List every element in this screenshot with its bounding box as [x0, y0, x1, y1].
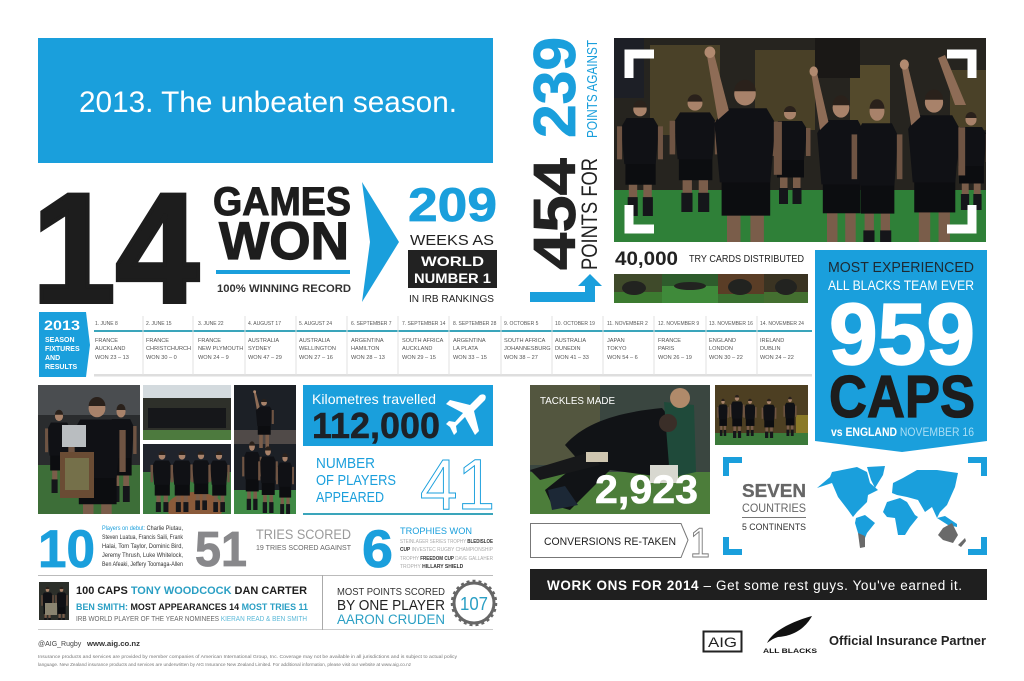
banner: work ons for 2014 — [530, 569, 987, 600]
photo strip — [614, 274, 808, 303]
stat: 40,000 try cards: 40,000 — [615, 249, 678, 270]
panel: 959 caps: MOST EXPERIENCED — [828, 260, 974, 276]
photo: four players on pitch — [143, 444, 231, 514]
stat: 6 trophies won: STEINLAGER SERIES TROPHY BLEDISLOE — [400, 539, 494, 545]
panel: kilometres travelled: 112,000 — [312, 405, 440, 446]
panel: season fixtures and results: 10. OCTOBER 19 — [555, 321, 595, 327]
stat: 209 weeks as world number 1: WEEKS AS — [410, 232, 494, 249]
logo: AIG — [704, 632, 742, 652]
stat: 2,923: 2,923 — [595, 468, 698, 512]
panel: season fixtures and results: JAPAN — [607, 338, 625, 344]
panel: season fixtures and results: PARIS — [658, 346, 675, 352]
panel: season fixtures and results: WON 33 – 15 — [453, 355, 487, 361]
legal text: language. New Zealand insurance products and services are underwritten by AIG Insurance New Zealand Limited. For additional information, please visit our website at www.aig.co.nz — [38, 662, 412, 668]
panel: 959 caps: vs ENGLAND NOVEMBER 16 — [831, 425, 974, 439]
stat: 6 trophies won: 6 — [362, 520, 393, 579]
photo: player with trophy — [38, 385, 140, 514]
stat: 209 weeks as world number 1: WORLD — [421, 254, 484, 269]
panel: season fixtures and results: AUSTRALIA — [555, 338, 586, 344]
panel: season fixtures and results: FRANCE — [658, 338, 681, 344]
stat: seven countries: COUNTRIES — [742, 501, 806, 515]
stat: 51 tries scored — [195, 523, 351, 577]
panel: season fixtures and results: WON 30 – 22 — [709, 355, 743, 361]
stat: 10 players on debut: Jeremy Thrush, Luke Whitelock, — [102, 553, 183, 559]
stat: number of players appeared: APPEARED — [316, 490, 384, 506]
panel: season fixtures and results: WON 26 – 19 — [658, 355, 692, 361]
stat: 14 games won: GAMES — [213, 180, 351, 224]
photo: team group with city — [143, 385, 231, 440]
stat: 454 points for: 454 — [522, 158, 588, 270]
photo: lineout — [234, 385, 296, 514]
callout: conversions re-taken: 1 — [690, 519, 710, 566]
stat: 14 games won — [32, 162, 351, 336]
panel: season fixtures and results: WON 30 – 0 — [146, 355, 177, 361]
contact line: @AIG_Rugby — [38, 641, 82, 648]
panel: season fixtures and results: 8. SEPTEMBER 28 — [453, 321, 497, 327]
arrow: points up — [530, 274, 602, 302]
stat: 209 weeks as world number 1: NUMBER 1 — [414, 271, 492, 286]
badge: 107: 107 — [460, 594, 488, 614]
panel: season fixtures and results: WON 38 – 27 — [504, 355, 538, 361]
panel: season fixtures and results: WON 29 – 15 — [402, 355, 436, 361]
stat: number of players appeared: NUMBER — [316, 456, 375, 472]
arrow: chevron — [362, 182, 399, 302]
panel: season fixtures and results: 11. NOVEMBER 2 — [607, 321, 648, 327]
panel: season fixtures and results: AND — [45, 355, 60, 362]
panel: season fixtures and results: AUCKLAND — [402, 346, 432, 352]
panel: season fixtures and results: 12. NOVEMBER 9 — [658, 321, 699, 327]
stat: 6 trophies won: TROPHY FREEDOM CUP DAVE GALLAHER — [400, 556, 493, 562]
stat: 209 weeks as world number 1: IN IRB RANKINGS — [409, 294, 494, 305]
panel: season fixtures and results: LONDON — [709, 346, 733, 352]
callout: conversions re-taken: CONVERSIONS RE-TAKEN — [544, 536, 676, 548]
panel: season fixtures and results: SYDNEY — [248, 346, 271, 352]
panel: season fixtures and results: TOKYO — [607, 346, 627, 352]
stat: 10 players on debut: Players on debut: Charlie Piutau, — [102, 526, 183, 532]
panel: season fixtures and results: SOUTH AFRICA — [504, 338, 546, 344]
title banner — [38, 38, 493, 163]
stat: 10 players on debut: 10 — [38, 520, 95, 579]
stat: 14 games won: 14 — [32, 162, 199, 336]
photo: tackle — [530, 385, 710, 514]
panel: season fixtures and results: AUSTRALIA — [248, 338, 279, 344]
stat: 10 players on debut: Steven Luatua, Francis Saili, Frank — [102, 535, 184, 541]
legal text — [38, 654, 458, 668]
contact line — [38, 639, 140, 648]
panel: season fixtures and results: 7. SEPTEMBER 14 — [402, 321, 446, 327]
stat: 209 weeks as world number 1: 209 — [408, 178, 497, 231]
official insurance partner: Official Insurance Partner — [829, 634, 986, 648]
panel: season fixtures and results: ARGENTINA — [453, 338, 486, 344]
panel: season fixtures and results: JOHANNESBURG — [504, 346, 551, 352]
stat: 239 points against: POINTS AGAINST — [584, 40, 601, 138]
panel: season fixtures and results: 4. AUGUST 17 — [248, 321, 281, 327]
panel: season fixtures and results: WELLINGTON — [299, 346, 336, 352]
title banner: 2013. The unbeaten season. — [79, 86, 457, 119]
icon: plane — [446, 394, 486, 435]
logo: All Blacks fern: ALL BLACKS — [763, 648, 818, 655]
stat: 6 trophies won: CUP INVESTEC RUGBY CHAMPIONSHIP — [400, 547, 494, 553]
stat: seven countries: 5 CONTINENTS — [742, 522, 806, 532]
badge: 107 — [452, 581, 496, 625]
logo: All Blacks fern — [763, 616, 818, 655]
blue corner brackets — [726, 460, 984, 552]
panel: season fixtures and results: FRANCE — [198, 338, 221, 344]
stat: 10 players on debut: Halai, Tom Taylor, Dominic Bird, — [102, 544, 183, 550]
stat: seven countries — [742, 481, 806, 532]
contact line: www.aig.co.nz — [86, 639, 140, 648]
records text block: IRB WORLD PLAYER OF THE YEAR NOMINEES KIERAN READ & BEN SMITH — [76, 614, 307, 623]
panel: season fixtures and results: 1. JUNE 8 — [95, 321, 118, 327]
panel: season fixtures and results: DUNEDIN — [555, 346, 580, 352]
panel: 959 caps: CAPS — [829, 364, 975, 430]
panel: season fixtures and results: FRANCE — [146, 338, 169, 344]
panel: season fixtures and results: HAMILTON — [351, 346, 379, 352]
stat: 14 games won: 100% WINNING RECORD — [217, 283, 351, 295]
panel: season fixtures and results: WON 47 – 29 — [248, 355, 282, 361]
panel: season fixtures and results: LA PLATA — [453, 346, 478, 352]
banner: work ons for 2014: WORK ONS FOR 2014 – Get some rest guys. You've earned it. — [547, 578, 962, 593]
panel: season fixtures and results: WON 24 – 9 — [198, 355, 229, 361]
panel: season fixtures and results: WON 27 – 16 — [299, 355, 333, 361]
panel: 959 caps: 959 — [829, 286, 975, 383]
panel: season fixtures and results: 6. SEPTEMBER 7 — [351, 321, 392, 327]
panel: season fixtures and results: RESULTS — [45, 364, 77, 371]
stat: 239 points against: 239 — [522, 37, 588, 138]
panel: 959 caps — [815, 250, 987, 452]
panel: season fixtures and results: 2. JUNE 15 — [146, 321, 172, 327]
logo: AIG: AIG — [708, 634, 737, 650]
records text block: 100 CAPS TONY WOODCOCK DAN CARTER — [76, 585, 307, 597]
photo corner brackets — [629, 54, 972, 229]
label: tackles made: TACKLES MADE — [540, 396, 615, 407]
panel: season fixtures and results — [39, 312, 812, 377]
panel: kilometres travelled: Kilometres travelled — [312, 391, 436, 407]
stat: number of players appeared: OF PLAYERS — [316, 473, 396, 489]
panel: season fixtures and results: 3. JUNE 22 — [198, 321, 224, 327]
panel: season fixtures and results: WON 41 – 33 — [555, 355, 589, 361]
stat: 6 trophies won — [362, 520, 494, 579]
panel: season fixtures and results: WON 24 – 22 — [760, 355, 794, 361]
most points scored — [337, 587, 445, 627]
panel: season fixtures and results: ENGLAND — [709, 338, 736, 344]
panel: kilometres travelled — [303, 385, 493, 446]
stat: 40,000 try cards — [615, 249, 804, 270]
panel: season fixtures and results: CHRISTCHURCH — [146, 346, 191, 352]
most points scored: BY ONE PLAYER — [337, 597, 445, 614]
world map — [817, 466, 966, 548]
panel: season fixtures and results: 2013 — [44, 317, 80, 333]
panel: season fixtures and results: 5. AUGUST 24 — [299, 321, 332, 327]
panel: season fixtures and results: WON 28 – 13 — [351, 355, 385, 361]
panel: season fixtures and results: AUCKLAND — [95, 346, 125, 352]
panel: season fixtures and results: 9. OCTOBER 5 — [504, 321, 539, 327]
panel: season fixtures and results: WON 54 – 6 — [607, 355, 638, 361]
stat: 51 tries scored: 51 — [195, 523, 247, 577]
panel: season fixtures and results: SEASON — [45, 337, 75, 344]
panel: season fixtures and results: ARGENTINA — [351, 338, 384, 344]
records text block: BEN SMITH: MOST APPEARANCES 14 MOST TRIES 11 — [76, 602, 308, 612]
most points scored: MOST POINTS SCORED — [337, 587, 445, 598]
stat: 51 tries scored: TRIES SCORED — [256, 527, 351, 542]
panel: season fixtures and results: SOUTH AFRICA — [402, 338, 444, 344]
stat: 6 trophies won: TROPHY HILLARY SHIELD — [400, 564, 464, 570]
panel: season fixtures and results: 13. NOVEMBER 16 — [709, 321, 753, 327]
panel: season fixtures and results: NEW PLYMOUTH — [198, 346, 243, 352]
stat: seven countries: SEVEN — [742, 481, 806, 501]
panel: season fixtures and results: IRELAND — [760, 338, 784, 344]
most points scored: AARON CRUDEN — [337, 612, 445, 627]
callout: conversions re-taken — [530, 519, 710, 566]
stat: 51 tries scored: 19 TRIES SCORED AGAINST — [256, 543, 351, 552]
panel: season fixtures and results: 14. NOVEMBER 24 — [760, 321, 804, 327]
stat: 454 points for: POINTS FOR — [577, 158, 602, 270]
stat: 40,000 try cards: TRY CARDS DISTRIBUTED — [689, 253, 804, 265]
stat: number of players appeared: 41 — [420, 446, 495, 525]
panel: season fixtures and results: AUSTRALIA — [299, 338, 330, 344]
stat: number of players appeared — [303, 446, 495, 525]
panel: season fixtures and results: FRANCE — [95, 338, 118, 344]
panel: season fixtures and results: WON 23 – 13 — [95, 355, 129, 361]
records text block — [76, 585, 308, 623]
legal text: Insurance products and services are provided by member companies of American International Group, Inc. Coverage may not be available in all jurisdictions and is subject to actual policy — [38, 654, 458, 660]
photo: team waving — [614, 38, 986, 242]
stat: 209 weeks as world number 1 — [408, 178, 497, 305]
panel: season fixtures and results: DUBLIN — [760, 346, 781, 352]
panel: 959 caps: ALL BLACKS TEAM EVER — [828, 277, 974, 293]
panel: season fixtures and results: FIXTURES — [45, 346, 80, 353]
stat: 10 players on debut — [38, 520, 184, 579]
stat: 10 players on debut: Ben Afeaki, Jeffery Toomaga-Allen — [102, 562, 183, 568]
photo: Woodcock and Carter — [39, 582, 69, 624]
photo: players running — [715, 385, 808, 445]
stat: 14 games won: WON — [219, 212, 349, 271]
stat: 6 trophies won: TROPHIES WON — [400, 526, 472, 537]
